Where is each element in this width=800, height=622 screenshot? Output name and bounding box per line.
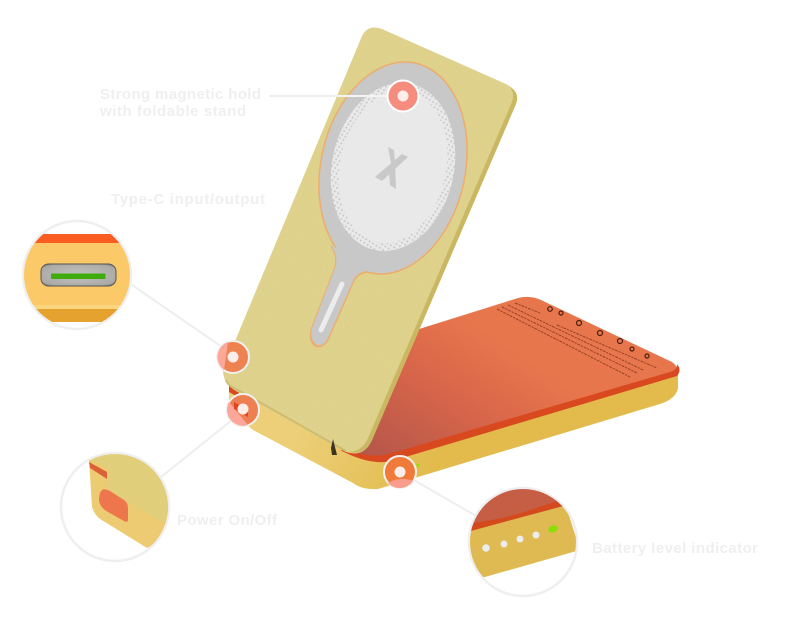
X logo [375, 147, 408, 189]
marker: power [227, 394, 259, 426]
power button [99, 489, 128, 522]
connector lines [132, 96, 476, 516]
label: power: Power On/Off [177, 512, 278, 529]
label: battery: Battery level indicator [592, 540, 758, 557]
USB-C port [40, 264, 116, 286]
yellow body [89, 460, 168, 548]
marker: battery [384, 456, 420, 488]
label: magnetic hold: Strong magnetic hold [100, 86, 261, 103]
left orange sliver [229, 382, 240, 396]
panel bottom edge [226, 380, 346, 451]
marker: Type-C [217, 341, 249, 373]
leader line over panel [337, 95, 390, 97]
markers [217, 80, 420, 488]
callout: battery indicator [468, 487, 578, 597]
panel right edge [348, 87, 517, 453]
regulatory text marks [497, 303, 657, 377]
callout: power button [61, 450, 180, 561]
base orange top [330, 297, 678, 459]
magnetic ring outline [299, 47, 487, 289]
orange top [471, 489, 562, 530]
ring handle [311, 245, 376, 345]
handle slit [321, 284, 342, 330]
hinge notch [331, 439, 337, 455]
dotted disc border [320, 76, 466, 258]
orange strip [89, 462, 107, 479]
yellow body [20, 243, 135, 305]
label: foldable stand: with foldable stand [99, 103, 246, 120]
callout: Type-C port [20, 221, 135, 329]
foldable stand panel [223, 28, 517, 455]
power bank base [229, 297, 680, 489]
label: Type-C: Type-C input/output [111, 191, 265, 208]
red rim [471, 501, 562, 531]
orange front rim [340, 364, 680, 462]
ring handle outline [310, 245, 375, 347]
marker: magnetic hold [388, 80, 418, 112]
yellow body [470, 504, 576, 578]
regulatory icons [548, 307, 649, 358]
charging disc [316, 71, 470, 263]
panel leather [223, 28, 517, 453]
LED dots [482, 524, 559, 552]
green contact bar [51, 274, 106, 279]
magnetic ring [301, 49, 485, 287]
orange band [34, 234, 120, 244]
leather fold [90, 454, 168, 524]
base yellow side [229, 370, 678, 489]
